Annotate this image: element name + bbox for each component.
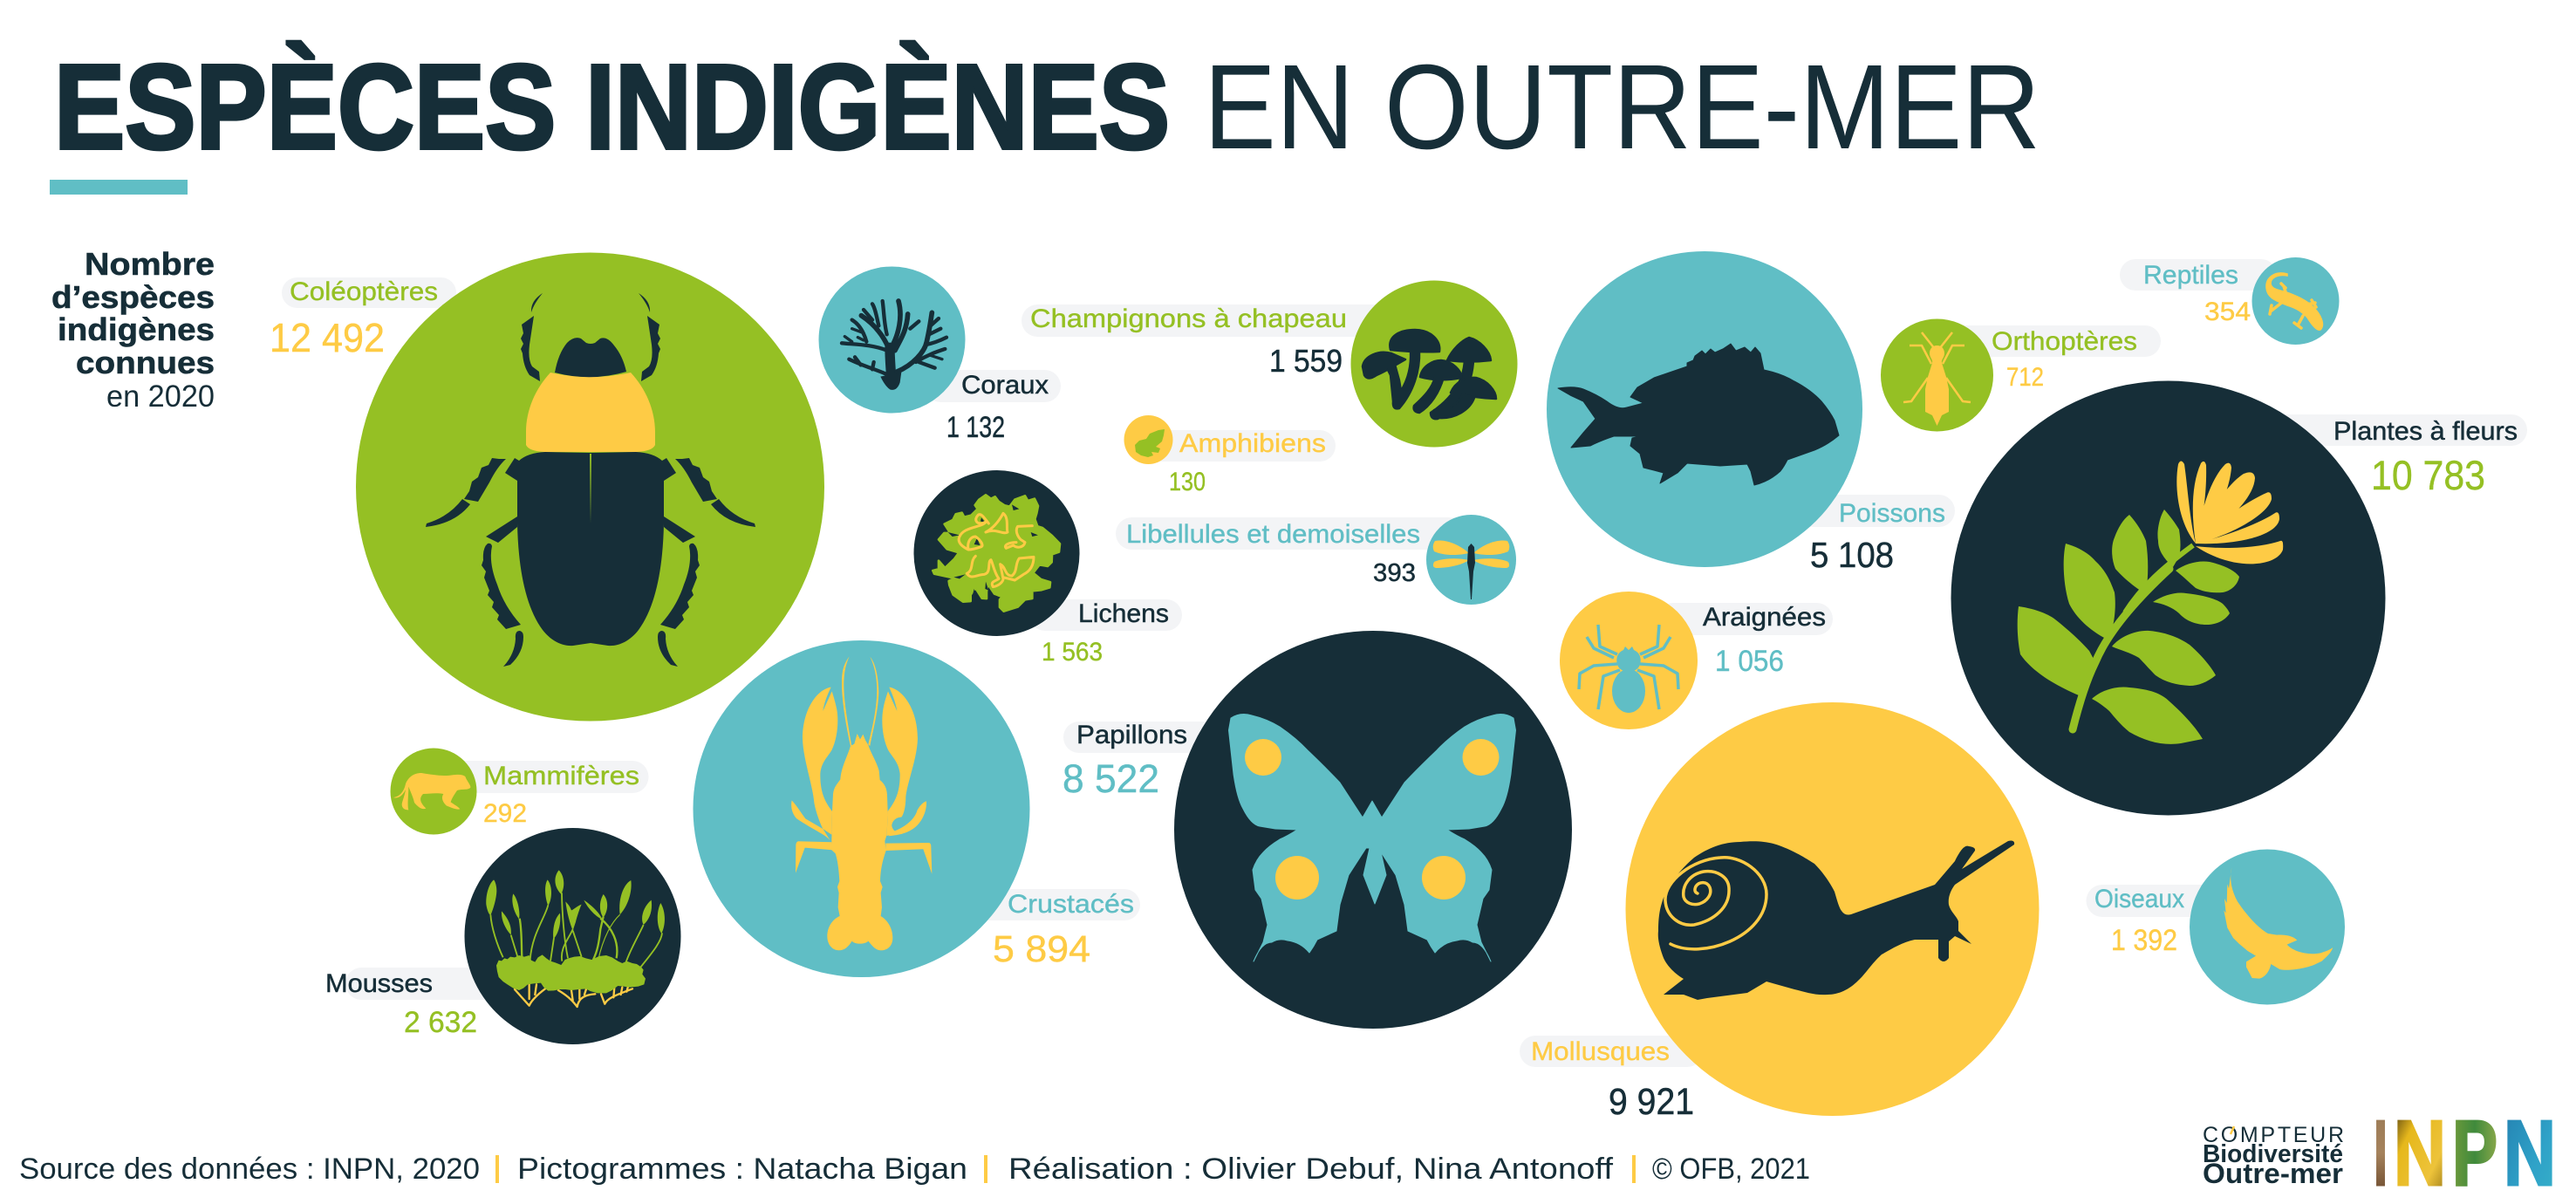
footer credits: Pictogrammes : Natacha Bigan — [517, 1153, 967, 1186]
panel: Mollusques: Mollusques — [1531, 1037, 1670, 1066]
title: EN OUTRE-MER — [1204, 40, 2040, 174]
icon: spider — [1579, 625, 1678, 713]
icon: crayfish — [791, 656, 932, 950]
logo: Compteur Biodiversité Outre-mer: COMPTEUR — [2203, 1123, 2344, 1147]
panel: Amphibiens: Amphibiens — [1179, 429, 1326, 458]
circle: Mammifères — [391, 749, 476, 834]
circle: Libellules et demoiselles — [1426, 515, 1516, 605]
value: Amphibiens: 130 — [1169, 468, 1206, 496]
value: Coléoptères: 12 492 — [270, 315, 385, 360]
panel: Coraux: Coraux — [961, 371, 1049, 400]
panel: Libellules et demoiselles — [1116, 515, 1516, 605]
value: Reptiles: 354 — [2204, 298, 2251, 326]
icon: butterfly — [1228, 715, 1516, 961]
panel: Champignons à chapeau: Champignons à chapeau — [1030, 304, 1347, 333]
panel: Papillons — [1063, 631, 1572, 1029]
icon: mushrooms — [1363, 330, 1496, 419]
footer credits: Source des données : INPN, 2020 — [19, 1153, 480, 1186]
circle: Crustacés — [693, 640, 1029, 977]
logo: Compteur Biodiversité Outre-mer — [2203, 1123, 2344, 1189]
value: Papillons: 8 522 — [1063, 756, 1159, 801]
value: Mollusques: 9 921 — [1609, 1081, 1694, 1123]
circle: Papillons — [1174, 631, 1572, 1029]
panel: Lichens — [914, 470, 1182, 667]
title underline bar — [50, 180, 188, 195]
value: Araignées: 1 056 — [1715, 645, 1784, 678]
panel: Crustacés — [693, 640, 1140, 977]
panel: Mousses: Mousses — [325, 969, 433, 998]
logo: INPN — [2374, 1102, 2556, 1204]
circle: Lichens — [914, 470, 1080, 636]
panel: Champignons à chapeau — [1022, 281, 1518, 447]
value: Lichens: 1 563 — [1042, 638, 1103, 667]
panel: Reptiles: Reptiles — [2143, 261, 2238, 290]
panel: Orthoptères — [1881, 319, 2161, 431]
panel: Coléoptères — [270, 253, 824, 721]
panel: Plantes à fleurs: Plantes à fleurs — [2333, 417, 2518, 446]
value: Mousses: 2 632 — [404, 1006, 477, 1039]
title — [54, 40, 2040, 174]
icon: feline — [393, 773, 470, 810]
circle: Amphibiens — [1124, 415, 1172, 464]
panel: Lichens: Lichens — [1078, 599, 1169, 628]
footer credits — [19, 1153, 1810, 1186]
icon: grasshopper — [1903, 332, 1971, 426]
panel: Araignées: Araignées — [1703, 603, 1826, 632]
panel: Mammifères: Mammifères — [483, 762, 639, 790]
value: Orthoptères: 712 — [2006, 363, 2044, 392]
panel: Oiseaux — [2087, 850, 2345, 1005]
panel: Oiseaux: Oiseaux — [2094, 885, 2184, 913]
circle: Orthoptères — [1881, 319, 1993, 431]
value: Libellules et demoiselles: 393 — [1373, 559, 1416, 587]
icon: frog — [1135, 429, 1165, 457]
value: Coraux: 1 132 — [946, 411, 1005, 444]
circle: Coraux — [818, 267, 965, 414]
footer credits: © OFB, 2021 — [1652, 1153, 1810, 1186]
value: Champignons à chapeau: 1 559 — [1269, 343, 1343, 379]
circle: Champignons à chapeau — [1350, 281, 1518, 447]
panel: Crustacés: Crustacés — [1008, 890, 1134, 919]
panel: Mammifères — [391, 749, 649, 834]
logo: INPN: N — [2504, 1102, 2556, 1204]
value: Crustacés: 5 894 — [993, 928, 1090, 970]
panel: Amphibiens — [1124, 415, 1336, 496]
footer credits: Réalisation : Olivier Debuf, Nina Antonoff — [1008, 1153, 1614, 1186]
logo: Compteur Biodiversité Outre-mer: Biodiversité — [2203, 1140, 2343, 1168]
circle: Mollusques — [1626, 702, 2040, 1116]
panel: Poissons: Poissons — [1839, 499, 1945, 528]
subtitle: nombre d'espèces: d’espèces — [51, 279, 215, 315]
circle: Oiseaux — [2190, 850, 2345, 1005]
icon: flower branch — [2018, 461, 2283, 744]
circle: Mousses — [464, 828, 680, 1044]
circle: Araignées — [1560, 592, 1698, 729]
logo: Compteur Biodiversité Outre-mer: Outre-mer — [2203, 1158, 2343, 1189]
subtitle: nombre d'espèces — [51, 246, 215, 414]
icon: coral — [842, 301, 946, 390]
panel: Orthoptères: Orthoptères — [1992, 327, 2137, 356]
circle: Plantes à fleurs — [1951, 380, 2385, 815]
value: Oiseaux: 1 392 — [2111, 924, 2177, 957]
icon: moss — [486, 870, 665, 1007]
subtitle: nombre d'espèces: en 2020 — [106, 380, 215, 414]
panel: Araignées — [1560, 592, 1833, 729]
logo: INPN: I — [2374, 1102, 2388, 1204]
panel: Reptiles — [2120, 257, 2340, 345]
panel: Coraux — [818, 267, 1061, 444]
panel: Libellules et demoiselles: Libellules et demoiselles — [1126, 520, 1420, 549]
icon: beetle — [426, 293, 755, 667]
subtitle: nombre d'espèces: Nombre — [85, 246, 215, 282]
panel: Mousses — [325, 828, 680, 1044]
panel: Poissons — [1547, 251, 1955, 575]
circle: Coléoptères — [356, 253, 824, 721]
value: Mammifères: 292 — [483, 799, 527, 828]
panel: Mollusques — [1520, 702, 2040, 1123]
title: ESPÈCES INDIGÈNES — [54, 40, 1170, 174]
icon: dragonfly — [1433, 541, 1509, 599]
subtitle: nombre d'espèces: connues — [76, 345, 215, 380]
logo: INPN: P — [2452, 1102, 2497, 1204]
icon: bird — [2224, 867, 2333, 979]
panel: Papillons: Papillons — [1076, 721, 1187, 749]
icon: lizard — [2266, 273, 2322, 330]
value: Plantes à fleurs: 10 783 — [2371, 452, 2485, 498]
value: Poissons: 5 108 — [1810, 535, 1894, 575]
icon: snail — [1658, 841, 2014, 1000]
circle: Reptiles — [2252, 257, 2340, 345]
icon: fish — [1558, 344, 1839, 485]
circle: Poissons — [1547, 251, 1862, 567]
panel: Plantes à fleurs — [1951, 380, 2527, 815]
subtitle: nombre d'espèces: indigènes — [58, 311, 215, 347]
logo: INPN: N — [2394, 1102, 2446, 1204]
panel: Coléoptères: Coléoptères — [290, 277, 438, 306]
icon: lichen — [933, 495, 1060, 612]
